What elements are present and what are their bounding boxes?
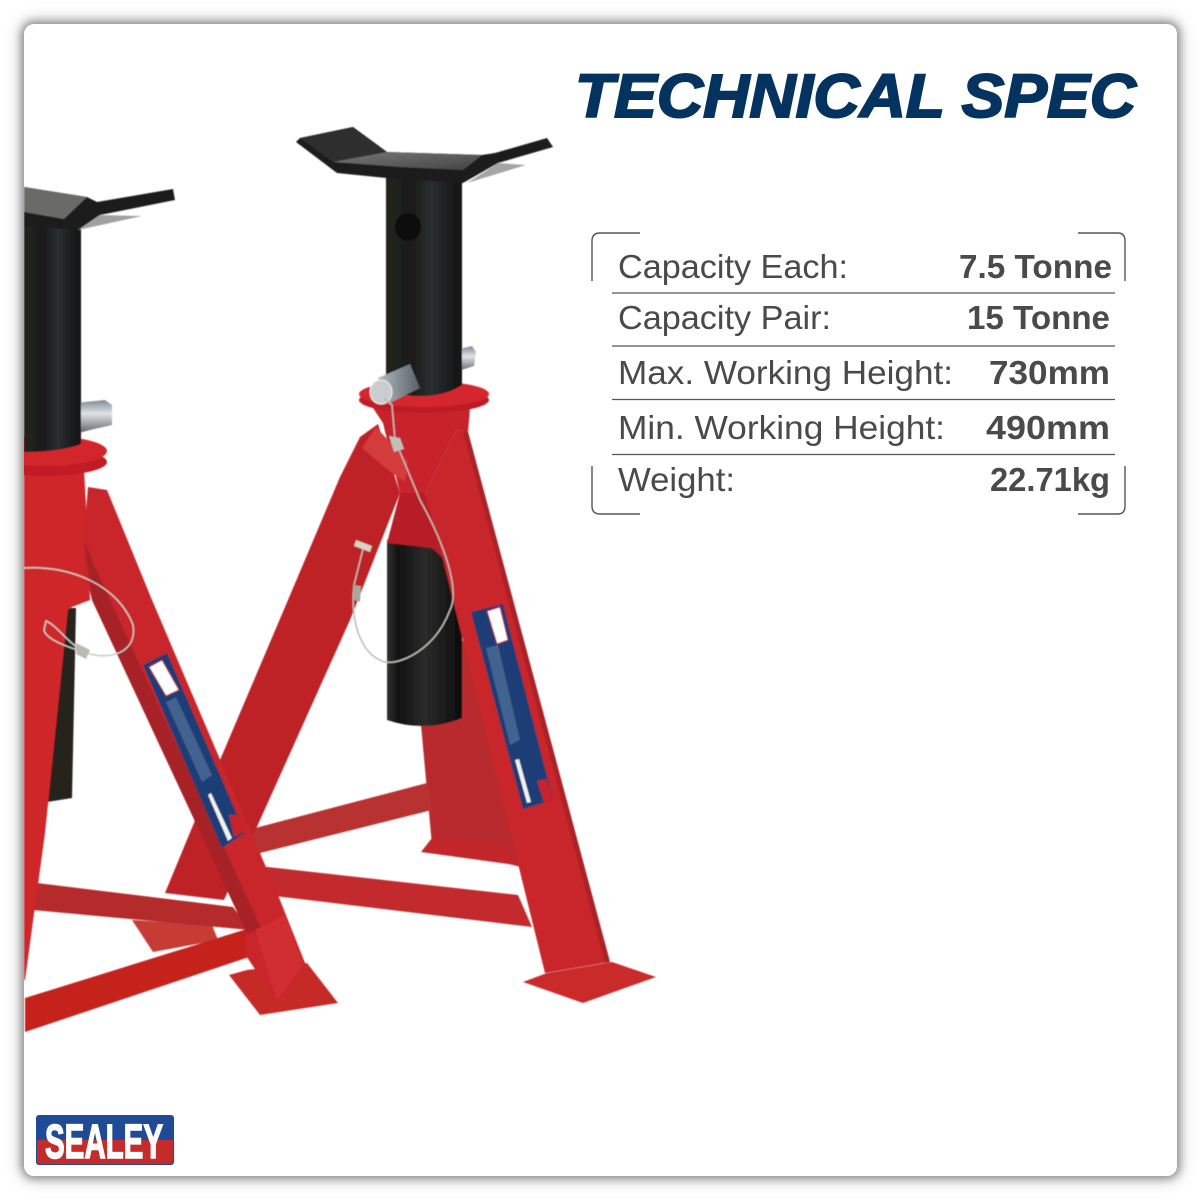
row: capacity each [618, 249, 1112, 286]
adjuster hole [395, 213, 421, 241]
label: right stand sticker [471, 604, 553, 809]
foot plate [229, 963, 338, 1015]
row dividers [612, 293, 1115, 454]
back foot [132, 920, 218, 952]
saddle [296, 127, 553, 183]
product photo: pair of axle stands [0, 127, 656, 1032]
row: min working height: 490mm [986, 410, 1110, 447]
foot plate [523, 962, 656, 1003]
row: max working height [618, 355, 1110, 392]
back leg and foot [421, 640, 525, 868]
logo: Sealey [36, 1115, 174, 1169]
front leg [82, 487, 305, 1003]
safety cable [353, 398, 453, 662]
lifting saddle tube [386, 175, 462, 396]
logo: Sealey: SEALEY [45, 1116, 163, 1169]
body and rear leg [24, 470, 90, 980]
row: max working height: Max. Working Height: [618, 355, 953, 392]
mid strut [33, 883, 250, 930]
back pin end [461, 346, 476, 370]
row: capacity pair [618, 300, 1110, 337]
row: weight [618, 462, 1110, 499]
saddle [24, 187, 175, 230]
spec table [592, 233, 1125, 514]
main leg [425, 430, 610, 973]
row: min working height: Min. Working Height: [618, 410, 945, 447]
row: capacity each: Capacity Each: [618, 249, 848, 286]
title: TECHNICAL SPEC [575, 62, 1137, 130]
bottom strut [25, 928, 255, 1032]
row: weight: 22.71kg [990, 462, 1110, 499]
row: max working height: 730mm [989, 355, 1110, 392]
safety cable [24, 568, 133, 656]
row: capacity pair: 15 Tonne [967, 300, 1110, 337]
locking pin [370, 364, 420, 404]
row: capacity pair: Capacity Pair: [618, 300, 831, 337]
inner black tube [47, 608, 76, 802]
back pin [80, 400, 112, 433]
axle stand: right [165, 127, 656, 1003]
axle stand: left, cropped [0, 187, 338, 1032]
flange [24, 436, 108, 476]
cross struts [240, 783, 532, 927]
row: min working height [618, 410, 1110, 447]
lifting tube [24, 225, 81, 452]
left leg [165, 424, 400, 900]
centre body under flange [373, 408, 470, 560]
row: capacity each: 7.5 Tonne [959, 249, 1112, 286]
flange [359, 381, 489, 413]
lower black tube [387, 540, 462, 726]
table frame brackets [592, 233, 1125, 514]
label: left stand sticker [143, 653, 245, 848]
row: weight: Weight: [618, 462, 735, 499]
